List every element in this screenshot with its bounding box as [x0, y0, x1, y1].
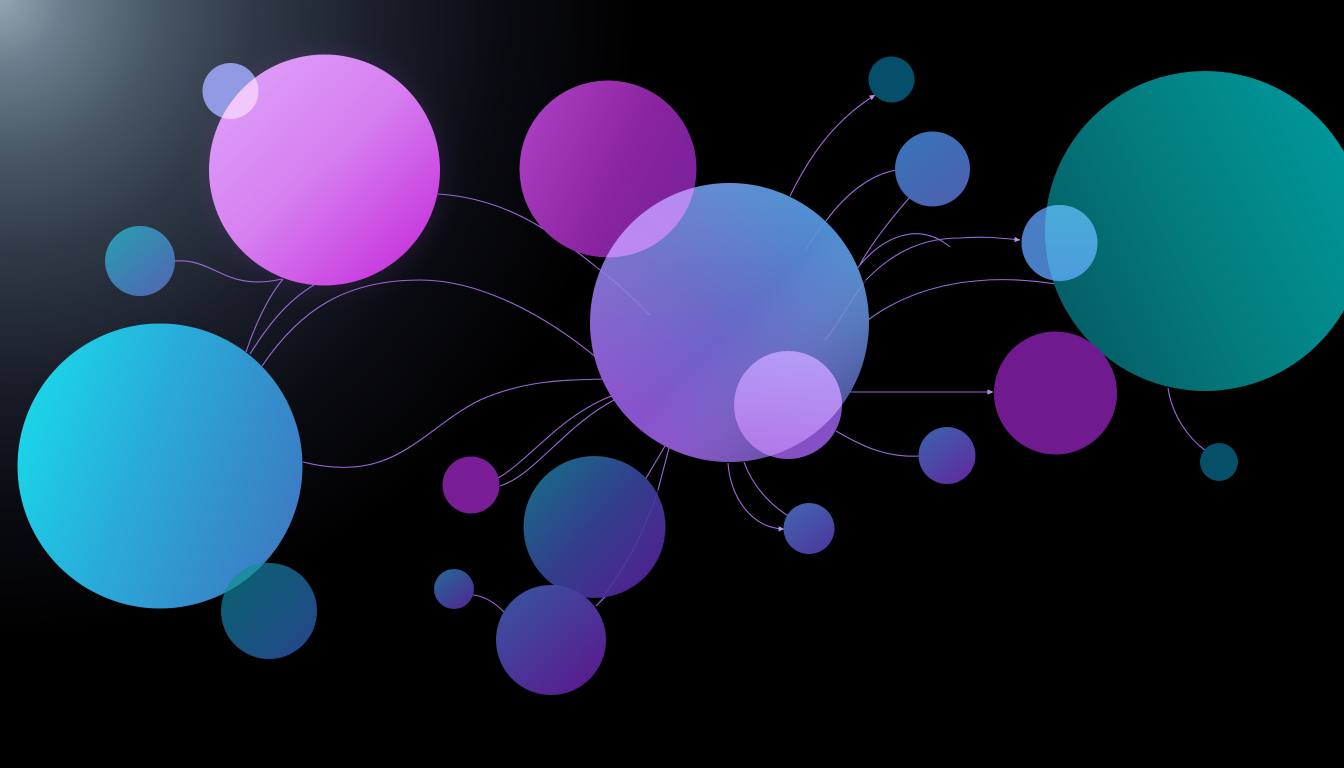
- circle: large teal: [1045, 71, 1344, 391]
- circle: upper purple: [520, 80, 696, 258]
- circle: small indigo lower centre: [784, 503, 834, 554]
- circle: central highlight with overlap: [734, 351, 842, 459]
- circle: bottom indigo: [496, 585, 606, 695]
- circle: upper right blue: [895, 132, 970, 206]
- circle: lower blue-violet: [524, 456, 666, 598]
- circle: small left teal: [105, 226, 175, 296]
- circle: top dark teal: [868, 56, 914, 102]
- circle: pink glow: [204, 50, 444, 290]
- circle: large cyan: [18, 324, 302, 608]
- circle: right purple: [994, 332, 1117, 454]
- circle: small lilac with overlap: [202, 63, 258, 119]
- circle: sky blue with overlap: [1022, 205, 1098, 281]
- circle: small indigo right: [918, 427, 976, 484]
- connector lines: [175, 95, 1206, 612]
- circle: large pink: [209, 54, 440, 286]
- faint lines over circles: [600, 221, 866, 340]
- circle: small magenta: [442, 456, 500, 514]
- circle: central violet-blue: [590, 183, 869, 462]
- faint line over lower circles: [596, 490, 658, 606]
- circle: small teal far right: [1200, 443, 1238, 481]
- circle: teal-blue with overlap: [221, 563, 317, 659]
- circle: small indigo bottom: [434, 569, 474, 609]
